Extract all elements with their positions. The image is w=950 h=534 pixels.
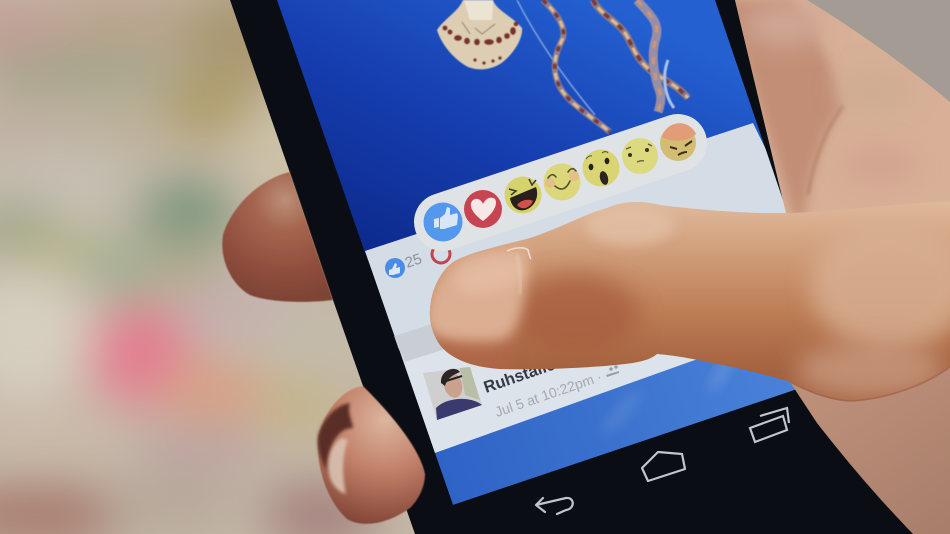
icon: sad xyxy=(622,138,658,174)
right tentacle xyxy=(593,0,688,98)
top right wall xyxy=(808,0,950,102)
left index finger xyxy=(222,167,333,302)
nail top light xyxy=(458,256,526,293)
avatar face xyxy=(441,370,465,400)
icon: haha xyxy=(504,176,542,214)
right side light area xyxy=(810,220,950,350)
poster avatar xyxy=(423,367,482,420)
top highlight xyxy=(745,3,825,47)
phone screen xyxy=(270,0,842,505)
avatar shoulders xyxy=(436,399,482,420)
cuticle flake xyxy=(507,248,531,259)
icon: small like badge xyxy=(385,258,405,278)
third tentacle xyxy=(637,0,661,112)
poster name: Ruhstaller xyxy=(481,353,564,397)
android home button xyxy=(642,452,685,481)
bottom blue strip xyxy=(435,360,801,505)
avatar glasses xyxy=(443,376,462,382)
avatar backdrop xyxy=(460,367,480,400)
like count number: 25 xyxy=(403,250,424,272)
icon: angry xyxy=(660,123,696,161)
nail tip xyxy=(425,243,527,348)
icon: love xyxy=(464,190,502,228)
android back button xyxy=(536,498,573,514)
post card white band xyxy=(365,123,815,453)
pink fold xyxy=(854,151,904,179)
jellyfish tentacles xyxy=(517,0,688,132)
avatar hair xyxy=(441,369,460,386)
popup pill xyxy=(443,143,678,222)
fold line xyxy=(808,106,843,195)
jellyfish red spots xyxy=(442,22,518,65)
icon: audience friends xyxy=(606,365,619,377)
nail bottom shade xyxy=(438,333,514,370)
web of thumb shade xyxy=(735,0,842,213)
left tentacle xyxy=(543,0,610,132)
reddish mid shading xyxy=(510,273,640,357)
icon: like xyxy=(424,202,462,242)
second post card xyxy=(404,350,695,453)
strip highlights xyxy=(606,394,638,431)
icon: wow xyxy=(582,150,620,186)
video area: blue sea xyxy=(270,0,830,260)
fingernail xyxy=(329,438,348,494)
post timestamp: Jul 5 at 10:22pm · xyxy=(493,368,604,420)
divider grey band xyxy=(394,324,444,362)
reactions popup bar xyxy=(424,123,696,242)
lower right tone xyxy=(795,342,945,398)
left lower finger xyxy=(318,386,425,524)
knuckle highlight xyxy=(835,68,915,112)
cuticle edge xyxy=(517,254,521,295)
icon: small heart badge xyxy=(432,245,450,263)
phone body xyxy=(230,0,915,534)
android recents button xyxy=(750,408,789,442)
dark cuticle and rim xyxy=(318,403,353,470)
icon: yay xyxy=(544,164,580,200)
palm crease xyxy=(790,367,950,401)
knuckle highlight xyxy=(585,205,675,245)
lower palm xyxy=(790,367,950,534)
thumb xyxy=(425,201,950,401)
jellyfish body xyxy=(437,0,522,69)
upper palm xyxy=(735,0,950,214)
like count row xyxy=(385,245,450,278)
